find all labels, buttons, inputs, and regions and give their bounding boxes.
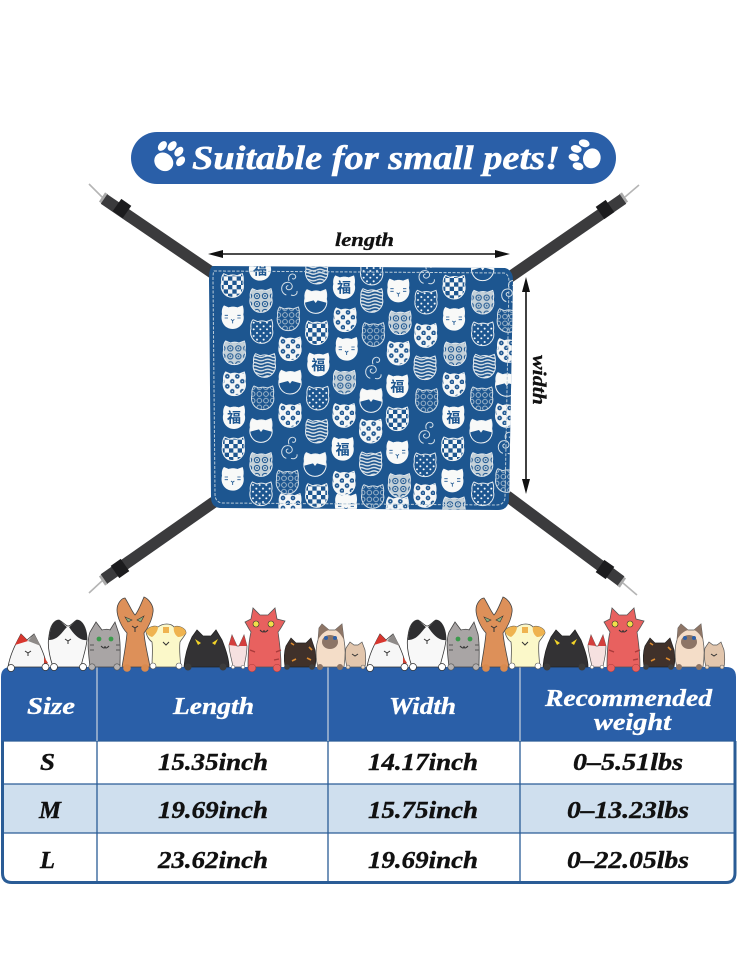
row M — [38, 798, 689, 824]
row L: 0–22.05lbs — [567, 848, 689, 874]
cats row: right set — [366, 597, 725, 672]
icon: right paw — [566, 137, 604, 175]
header labels: Length — [172, 694, 254, 720]
hammock fabric with cat pattern — [209, 266, 513, 510]
arrow: length — [208, 250, 510, 258]
row S: 15.35inch — [158, 750, 268, 776]
row L — [39, 848, 689, 874]
strap: bottom left — [89, 502, 214, 593]
row S — [40, 750, 683, 776]
header labels: Recommended — [544, 686, 713, 712]
header labels — [27, 686, 713, 736]
table body rows — [2, 667, 735, 882]
banner text: Suitable for small pets! — [192, 140, 560, 177]
header labels: Size — [27, 694, 75, 720]
arrow: width — [522, 277, 530, 494]
row S: 14.17inch — [368, 750, 478, 776]
header labels: Width — [389, 694, 456, 720]
row M: 0–13.23lbs — [567, 798, 689, 824]
icon: left paw — [147, 135, 191, 179]
row L: 23.62inch — [157, 848, 268, 874]
row S: 0–5.51lbs — [573, 750, 683, 776]
title banner — [131, 132, 616, 184]
row M: M — [38, 798, 63, 824]
header labels: weight — [594, 710, 673, 736]
strap: top left — [89, 184, 214, 274]
size table — [1, 667, 736, 882]
row M: 15.75inch — [368, 798, 478, 824]
row S: S — [40, 750, 55, 776]
row L: 19.69inch — [368, 848, 478, 874]
label: length: length — [335, 230, 394, 251]
row L: L — [39, 848, 55, 874]
label: width: width — [528, 355, 549, 405]
row M: 19.69inch — [158, 798, 268, 824]
table header background — [1, 667, 736, 741]
strap: top right — [507, 185, 639, 279]
strap: bottom right — [507, 496, 637, 595]
cats row: left set — [8, 597, 366, 672]
